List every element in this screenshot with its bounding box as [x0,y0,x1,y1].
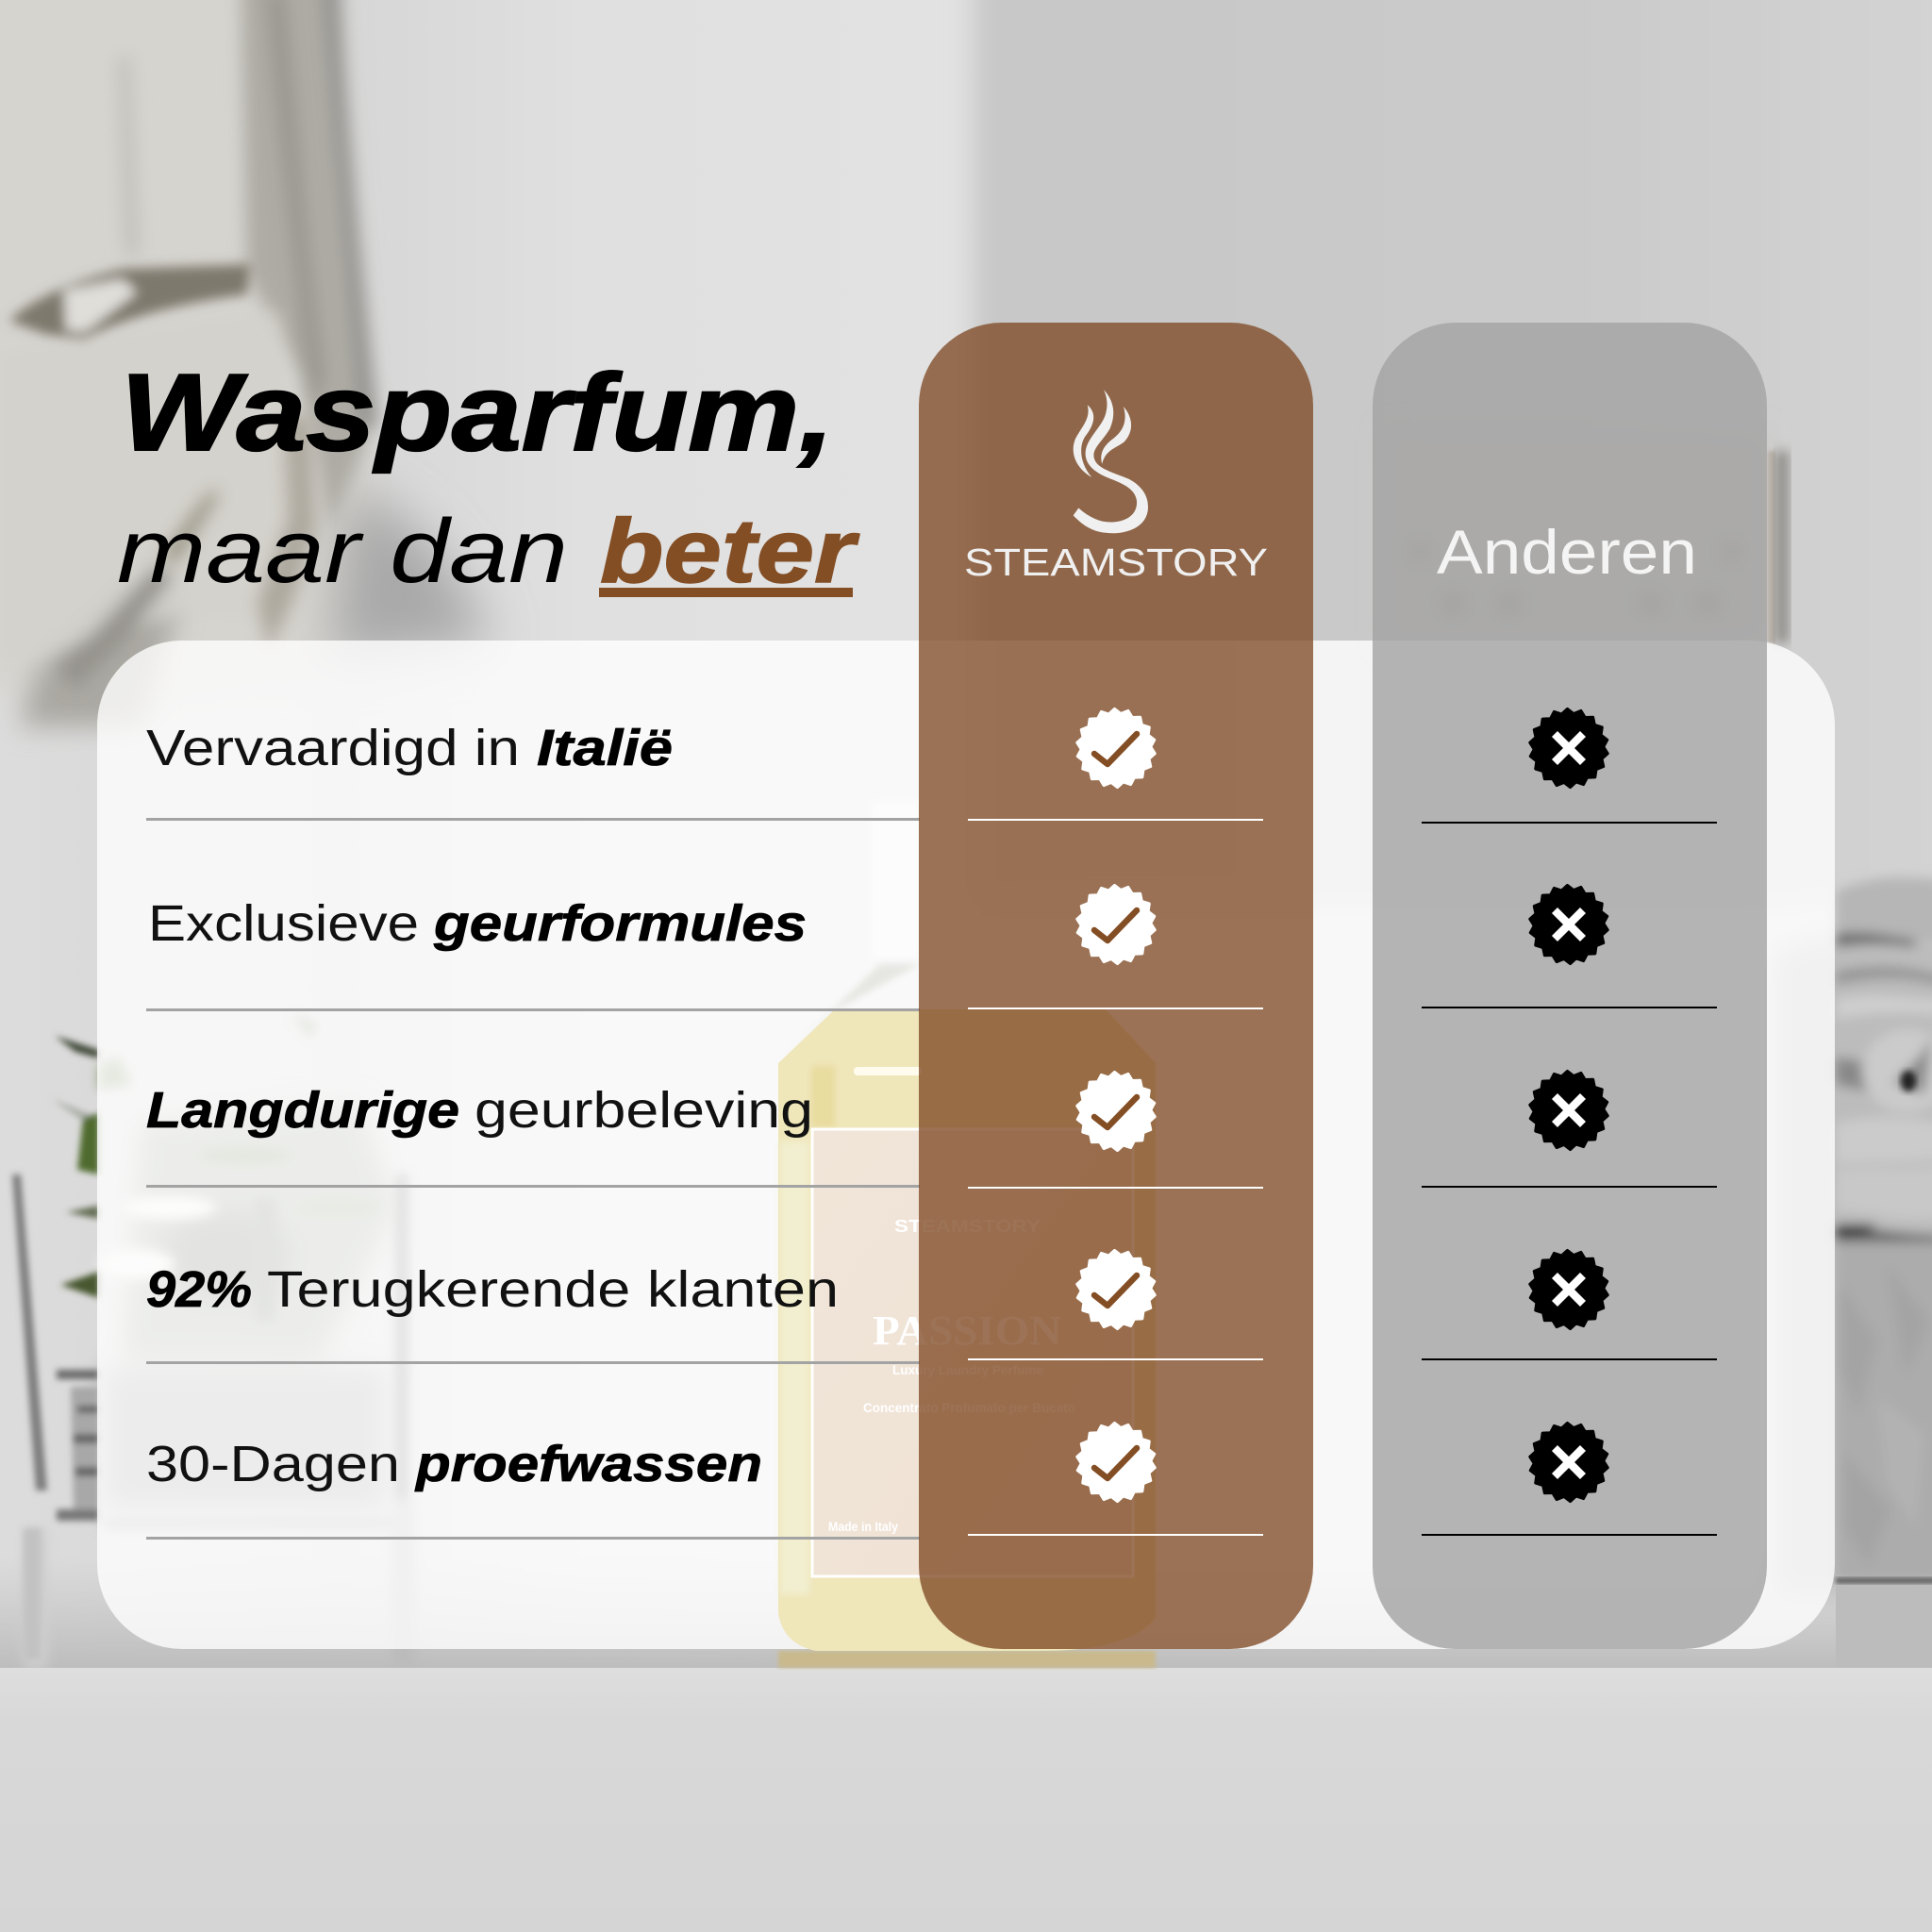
title: beter [600,501,859,602]
title [117,351,859,602]
product bottle seen through the card: STEAMSTORY [894,1217,1041,1236]
column heading: Anderen [1437,517,1697,587]
row labels and dividers: Vervaardigd in [146,720,520,776]
icon: cross badge 2 [1524,881,1613,968]
picture frame behind Anderen column [1387,434,1789,643]
product bottle seen through the card: Concentrato Profumato per Bucato [863,1400,1075,1415]
column: Steamstory [919,323,1313,1649]
cross dividers [1422,822,1717,1536]
icon: check badge 2 [1072,881,1160,968]
row labels and dividers: Italië [537,720,673,776]
folded towels [1774,877,1932,1668]
product bottle seen through the card: Made in Italy [828,1519,898,1534]
row labels and dividers: geurformules [433,895,807,952]
plant and vase [12,1014,415,1668]
icon: check badge 3 [1072,1068,1160,1155]
title: maar dan [117,501,568,602]
icon: check badge 4 [1072,1246,1160,1333]
row labels and dividers: Langdurige [146,1082,459,1139]
column: Anderen [1373,323,1767,1649]
title: Wasparfum, [121,351,834,474]
row labels and dividers: Terugkerende klanten [267,1261,839,1318]
icon: Steamstory steam logo [1074,390,1148,533]
row labels and dividers: geurbeleving [475,1082,813,1139]
row labels and dividers: 30-Dagen [146,1436,400,1492]
row labels and dividers: Exclusieve [148,895,419,952]
bottle reflection [778,1651,1156,1668]
icon: cross badge 5 [1524,1419,1613,1506]
product bottle seen through the card: Luxury Laundry Perfume [892,1362,1043,1377]
icon: check badge 5 [1072,1419,1160,1506]
floor surface [0,1668,1932,1932]
icon: cross badge 3 [1524,1067,1613,1154]
panel: comparison table card [97,641,1835,1649]
product bottle seen through the card [778,802,1156,1651]
row labels and dividers: proefwassen [414,1436,762,1492]
check dividers [968,819,1263,1536]
icon: cross badge 1 [1524,705,1613,791]
row labels and dividers: 92% [146,1261,252,1318]
hanging towel [0,0,491,726]
icon: check badge 1 [1072,705,1160,791]
icon: cross badge 4 [1524,1246,1613,1333]
row labels and dividers [146,720,920,1540]
product bottle seen through the card: PASSION [873,1307,1061,1354]
brand name: STEAMSTORY [964,541,1268,584]
